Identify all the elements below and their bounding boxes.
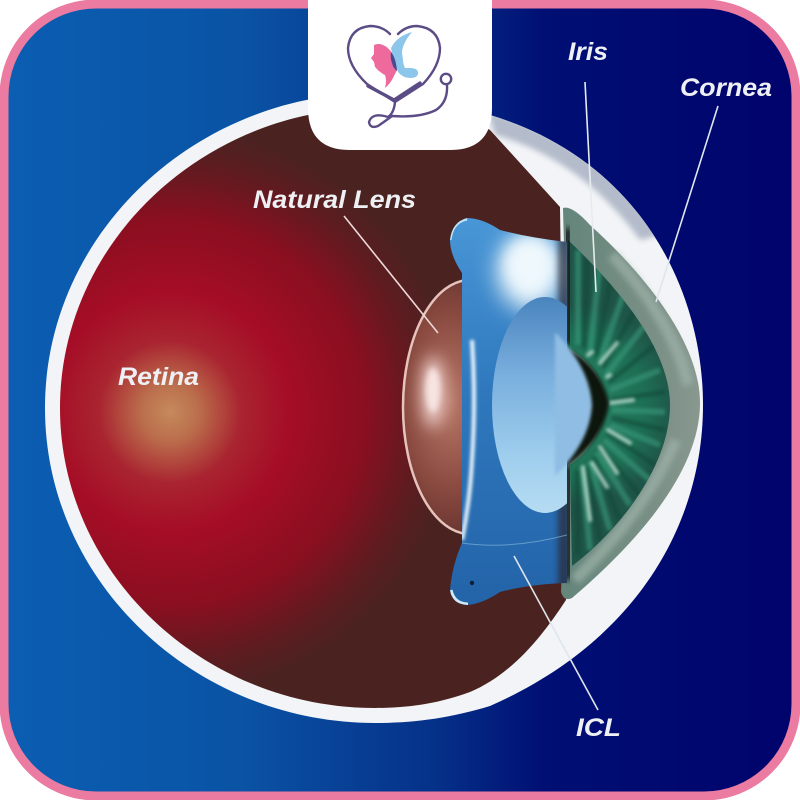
logo: blue face bbox=[391, 32, 418, 78]
natural lens bbox=[402, 280, 462, 534]
logo: pink face bbox=[371, 44, 397, 88]
dark gap between ICL and iris bbox=[567, 228, 569, 580]
iris radial fibres bbox=[577, 245, 665, 555]
implantable collamer lens (ICL) bbox=[450, 218, 594, 605]
sclera grey shading bbox=[488, 112, 660, 240]
label: Retina: Retina bbox=[118, 363, 199, 391]
ICL optic zone bbox=[492, 297, 567, 513]
label: ICL bbox=[514, 556, 621, 742]
label: Iris: Iris bbox=[568, 38, 608, 66]
ICL optic bump bbox=[555, 332, 592, 476]
label: Iris bbox=[568, 38, 608, 292]
iris and cornea layers bbox=[558, 208, 700, 599]
label: Natural Lens: Natural Lens bbox=[253, 186, 416, 214]
positioning hole bbox=[470, 581, 474, 585]
label: Cornea bbox=[656, 74, 772, 302]
logo: stethoscope heart bbox=[348, 26, 451, 127]
cornea light inner band bbox=[575, 255, 688, 580]
label: ICL: ICL bbox=[576, 714, 621, 742]
pupil dark area bbox=[558, 345, 609, 470]
logo tab bbox=[308, 0, 492, 150]
label: Natural Lens bbox=[253, 186, 438, 333]
label: Cornea: Cornea bbox=[680, 74, 772, 102]
cornea grey band bbox=[561, 208, 700, 599]
iris green bbox=[568, 240, 670, 566]
cornea and sclera white shell bbox=[45, 93, 703, 723]
iris pale highlights bbox=[583, 343, 633, 520]
retina chamber with red gradient bbox=[60, 108, 566, 708]
eyeball cross-section bbox=[45, 93, 703, 723]
logo: overlap bbox=[391, 52, 397, 71]
